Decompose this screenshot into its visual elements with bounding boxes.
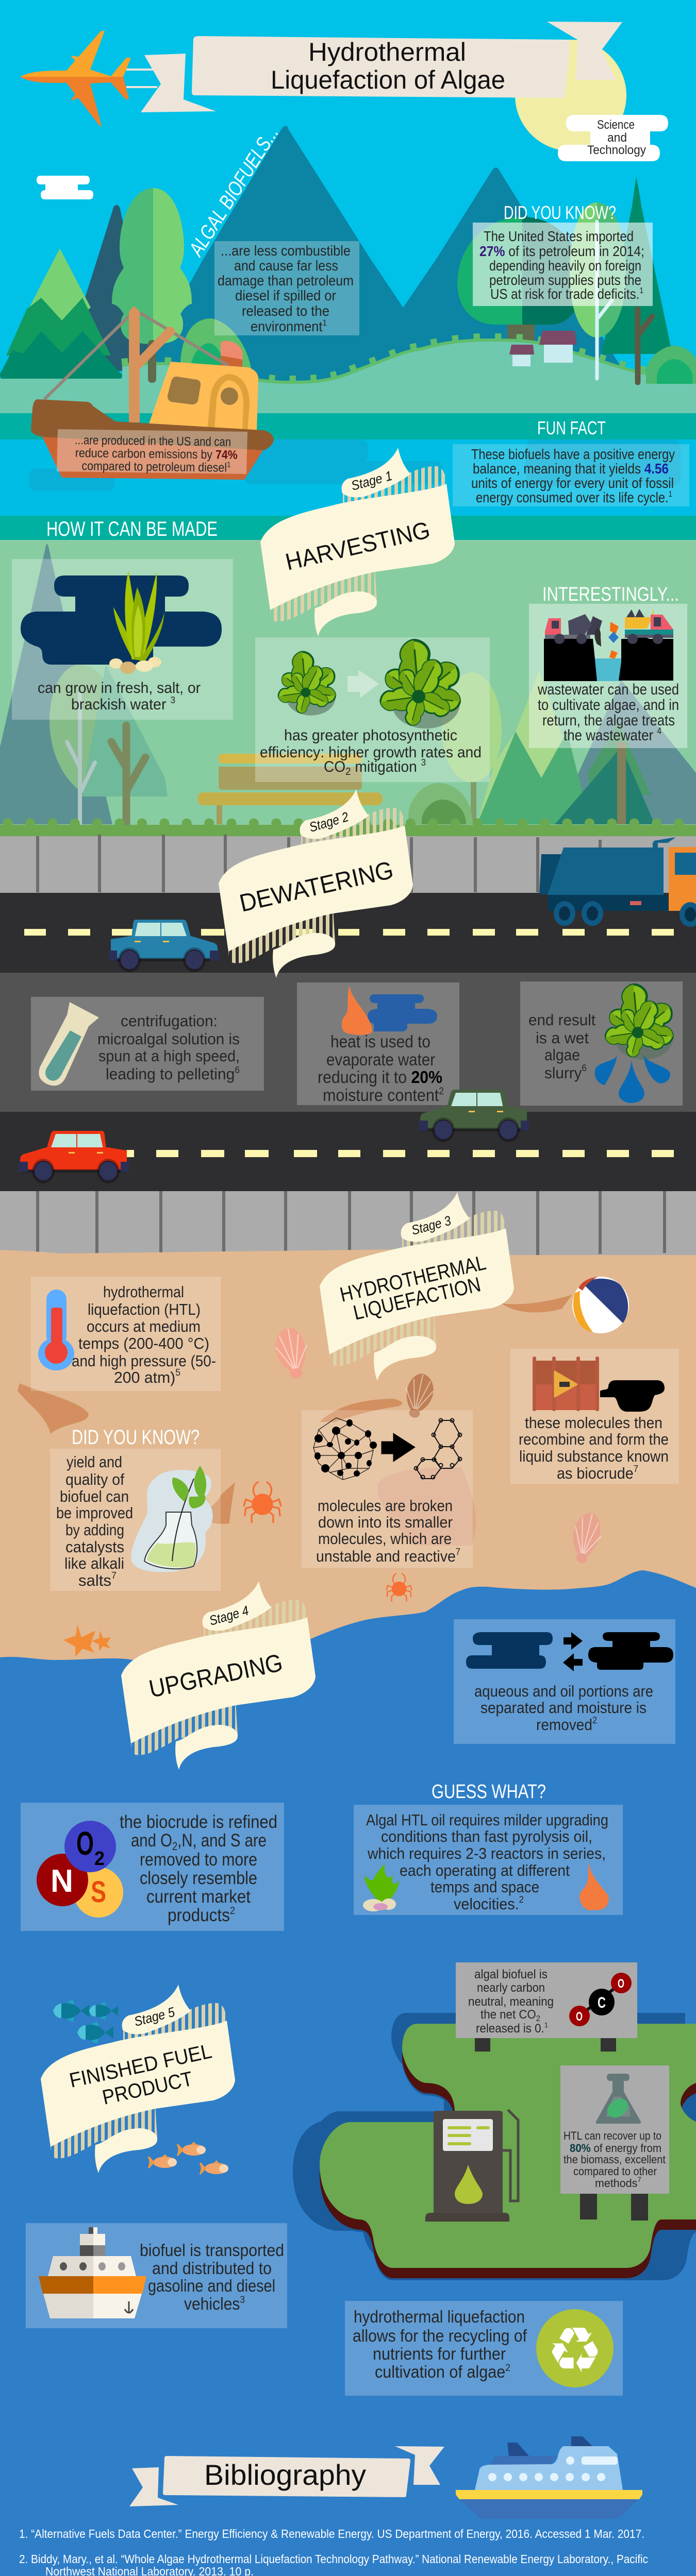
title banner [141, 22, 622, 112]
panel: biocrude refined: the biocrude is refined [120, 1812, 277, 1832]
callout: petroleum imports [473, 223, 653, 306]
panel: wet algae slurry: 6 [582, 1063, 587, 1073]
sign: energy recovery: 80% of energy from [570, 2142, 661, 2155]
icon: garbage truck [539, 837, 696, 927]
panel: milder upgrading conditions: conditions than fast pyrolysis oil, [381, 1827, 592, 1845]
icon: seaweed [109, 570, 164, 674]
callout: fun fact [453, 444, 689, 506]
icon: green car [419, 1090, 529, 1142]
banner: stage 3 hydrothermal liquefaction [320, 1192, 514, 1381]
panel: milder upgrading conditions: which requires 2-3 reactors in series, [367, 1844, 606, 1862]
panel: photosynthetic efficiency: mitigation [351, 758, 421, 775]
science and technology cloud label: Technology [587, 143, 646, 157]
title text line 1: Hydrothermal [308, 38, 466, 66]
banner: stage 5 finished fuel product: PRODUCT [101, 2067, 195, 2109]
heading: did you know (catalysts): DID YOU KNOW? [72, 1426, 200, 1449]
panel: recycling nutrients: cultivation of algae [375, 2362, 516, 2381]
panel: aqueous and oil separation: separated and moisture is [480, 1699, 647, 1717]
tree behind boat [112, 188, 192, 383]
background: sand [0, 1249, 696, 1700]
banner: stage 3 hydrothermal liquefaction: LIQUEFACTION [351, 1273, 483, 1325]
callout: produced in the US: reduce carbon emissions by 74% [75, 446, 238, 462]
panel: grows in any water: brackish water [71, 696, 171, 713]
callout: fun fact: balance, meaning that it yields 4.56 [473, 461, 669, 477]
panel: photosynthetic efficiency: has greater photosynthetic [284, 727, 457, 744]
panel: transported and distributed: gasoline and diesel [148, 2276, 275, 2295]
small white cloud [37, 176, 93, 199]
panel: aqueous and oil separation: removed [536, 1716, 599, 1734]
icon: white ship [39, 2227, 146, 2318]
callout: petroleum imports: depending heavily on foreign [489, 258, 641, 274]
panel: heat evaporates water: evaporate water [326, 1050, 435, 1069]
icon: CO2 molecule: C [598, 1994, 606, 2011]
sign: carbon neutral: 1 [544, 2021, 548, 2029]
panel: catalysts: like alkali [64, 1554, 124, 1572]
callout: produced in the US: compared to petroleum diesel [81, 459, 245, 475]
banner: stage 2 dewatering: DEWATERING [237, 856, 396, 918]
road 1 [0, 893, 696, 973]
icon: recycle [536, 2309, 614, 2387]
icon: O2 N S circles: O [76, 1825, 94, 1862]
houses [509, 331, 577, 366]
panel: transported and distributed: 3 [240, 2295, 245, 2306]
callout: produced in the US: ...are produced in the US and can [75, 433, 231, 449]
panel: biocrude refined: current market [146, 1887, 251, 1907]
sign: carbon neutral: the net CO [480, 2008, 540, 2022]
panel: molecules broken down: 7 [456, 1547, 460, 1557]
callout: petroleum imports: The United States imported [484, 228, 634, 244]
panel: centrifugation: microalgal solution is [97, 1030, 240, 1048]
banner: stage 1 harvesting [260, 448, 455, 636]
panel: heat evaporates water: 2 [439, 1086, 444, 1097]
panel: HTL conditions: 200 atm) [114, 1368, 177, 1386]
panel: photosynthetic efficiency: 2 [345, 766, 351, 777]
sign: carbon neutral: released is 0. [476, 2022, 550, 2036]
faded scenery behind harvesting [0, 544, 696, 824]
icon: water cloud [21, 575, 222, 665]
panel: heat evaporates water: reducing it to 20% [318, 1067, 442, 1087]
callout: petroleum imports: US at risk for trade deficits. [490, 286, 664, 302]
icon: flame [579, 1862, 609, 1910]
icon: falling waste [594, 622, 619, 659]
icon: blue cloud [368, 994, 437, 1031]
icon: CO2 molecule [569, 1973, 632, 2026]
icon: barrel and black cloud [533, 1357, 665, 1412]
evergreen base redraw [0, 331, 122, 379]
background: water [0, 439, 696, 516]
panel: recycling nutrients: allows for the recycling of [353, 2326, 527, 2345]
icon: right truck [625, 609, 673, 644]
boat hull [31, 399, 274, 480]
left tree trunk [148, 340, 156, 383]
bibliography banner [129, 2446, 444, 2506]
banner: stage 5 finished fuel product [41, 1985, 235, 2173]
icon: O2 N S circles: S [91, 1875, 106, 1909]
banner: stage 2 dewatering: Stage 2 [307, 809, 351, 835]
banner: stage 5 finished fuel product: Stage 5 [132, 2004, 176, 2029]
panel: HTL conditions: 5 [175, 1367, 180, 1378]
sign: energy recovery [560, 2065, 669, 2221]
panel: transported and distributed: biofuel is transported [140, 2241, 284, 2260]
callout: petroleum imports: 1 [639, 286, 643, 295]
panel: milder upgrading conditions: 2 [519, 1894, 524, 1905]
grass strip [0, 823, 696, 836]
panel: centrifugation: leading to pelleting [106, 1065, 239, 1083]
icon: flask with leaves [131, 1466, 213, 1572]
arrow: black [382, 1433, 415, 1462]
icon: cliffs and waste water [544, 616, 673, 681]
callout: less combustible: environment [251, 318, 330, 334]
panel: photosynthetic efficiency: 3 [421, 757, 426, 768]
lower fence [0, 1191, 696, 1258]
bibliography list [19, 2527, 671, 2576]
birch tree [597, 222, 612, 379]
callout: less combustible: diesel if spilled or [235, 287, 336, 303]
panel: centrifugation: 6 [235, 1065, 240, 1075]
panel: milder upgrading conditions: temps and space [430, 1878, 539, 1896]
panel: catalysts: quality of [65, 1470, 124, 1488]
panel: HTL conditions: liquefaction (HTL) [88, 1300, 201, 1318]
panel: centrifugation: spun at a high speed, [98, 1047, 240, 1065]
background: teal shoreline band [0, 413, 696, 439]
panel: catalysts [50, 1449, 221, 1591]
island with shadows [293, 2013, 696, 2280]
icon: red car [19, 1131, 129, 1183]
panel: catalysts: biofuel can [60, 1487, 129, 1505]
banner: stage 4 upgrading: Stage 4 [207, 1602, 251, 1629]
callout: less combustible [214, 241, 359, 335]
panel: recycling nutrients: nutrients for further [373, 2344, 506, 2363]
banner: stage 4 upgrading: UPGRADING [147, 1649, 285, 1703]
icon: CO2 molecule: O [618, 1977, 624, 1991]
icon: test tube [39, 1002, 99, 1086]
panel: molecules broken down [302, 1410, 476, 1568]
panel: photosynthetic efficiency: efficiency: higher growth rates and [260, 744, 482, 761]
panel: HTL conditions [31, 1277, 221, 1391]
icon: O2 N S circles: N [51, 1863, 73, 1899]
callout: produced in the US [57, 429, 247, 475]
callout: produced in the US: 1 [227, 461, 231, 469]
evergreen tree left [0, 248, 122, 379]
arrow: right [564, 1632, 583, 1650]
panel: molecules broken down: molecules, which are [318, 1530, 452, 1548]
icon: beach ball [572, 1277, 629, 1333]
panel: catalysts: yield and [67, 1453, 122, 1471]
background: green meadow [0, 540, 696, 828]
sign: carbon neutral: nearly carbon [477, 1981, 545, 1995]
sign: energy recovery: HTL can recover up to [564, 2129, 661, 2142]
light green tree right [570, 202, 626, 337]
icon: large plant [379, 639, 465, 728]
heading: guess what: GUESS WHAT? [432, 1781, 546, 1803]
panel: wet algae slurry: is a wet [536, 1029, 589, 1047]
panel: catalysts: salts [78, 1571, 111, 1589]
panel: biocrude molecules: 7 [634, 1464, 638, 1474]
callout: less combustible: and cause far less [234, 258, 338, 274]
callout: less combustible: released to the [242, 303, 329, 319]
panel: biocrude molecules [510, 1349, 679, 1484]
sign: carbon neutral: algal biofuel is [474, 1968, 548, 1981]
callout: petroleum imports: 27% of its petroleum in 2014; [479, 243, 644, 259]
panel: biocrude refined: products [168, 1905, 237, 1925]
panel: catalysts: 7 [111, 1570, 117, 1581]
icon: starfish [63, 1624, 111, 1657]
heading: did you know (top): DID YOU KNOW? [504, 202, 616, 223]
background: grey dewatering area [0, 973, 696, 1112]
panel: recycling nutrients [345, 2301, 623, 2396]
chimney [221, 341, 243, 368]
panel: biocrude refined: 2 [172, 1840, 177, 1853]
panel: heat evaporates water [297, 982, 459, 1105]
icon: teal fish group [53, 1999, 118, 2044]
banner: stage 3 hydrothermal liquefaction: HYDROTHERMAL [338, 1251, 488, 1307]
icon: CO2 molecule: O [576, 2010, 583, 2024]
sign: carbon neutral: neutral, meaning [468, 1995, 554, 2009]
panel: aqueous and oil separation [454, 1619, 675, 1744]
banner: stage 3 hydrothermal liquefaction: Stage 3 [410, 1213, 453, 1238]
panel: biocrude molecules: as biocrude [557, 1464, 639, 1482]
panel: transported and distributed: vehicles [184, 2294, 245, 2313]
icon: orange plane [20, 31, 157, 126]
arrow: left [563, 1653, 583, 1671]
panel: biocrude refined: closely resemble [140, 1868, 257, 1888]
heading: how it can be made: HOW IT CAN BE MADE [46, 518, 218, 540]
science and technology cloud label: Science [597, 118, 635, 132]
sand patches [18, 1295, 572, 1524]
bush behind boat [180, 318, 253, 392]
panel: grows in any water: can grow in fresh, salt, or [38, 680, 201, 697]
icon: thermometer [38, 1290, 74, 1370]
icon: black cloud [588, 1632, 673, 1670]
boat cabin [148, 362, 258, 432]
road 2 [0, 1112, 696, 1191]
panel: wet algae slurry: slurry [544, 1064, 584, 1082]
icon: blue car [109, 920, 219, 972]
title text line 2: Liquefaction of Algae [271, 65, 505, 94]
panel: biocrude molecules: these molecules then [525, 1414, 662, 1432]
panel: wet algae slurry [520, 981, 683, 1106]
panel: molecules broken down: molecules are broken [318, 1497, 453, 1515]
icon: plant [604, 984, 677, 1060]
icon: growth arrow [347, 670, 379, 698]
bare brown tree [638, 309, 652, 382]
panel: heat evaporates water: moisture content [323, 1086, 449, 1105]
icon: O2 N S circles [37, 1821, 123, 1918]
icon: crab small [386, 1573, 412, 1602]
text: algal biofuels heading: ALGAL BIOFUELS... [185, 123, 283, 261]
icon: O2 N S circles: 2 [94, 1848, 105, 1870]
callout: less combustible: ...are less combustible [221, 243, 351, 259]
panel: catalysts: by adding [65, 1521, 124, 1539]
water shadows [29, 439, 681, 491]
panel: recycling nutrients: 2 [505, 2363, 510, 2374]
panel: wastewater: return, the algae treats [542, 712, 675, 729]
icon: droplets [595, 1055, 670, 1103]
panel: wet algae slurry: end result [528, 1011, 595, 1029]
icon: recycle: ♻ [546, 2314, 603, 2387]
background: ocean [0, 1570, 696, 2576]
bibliography list: 1. “Alternative Fuels Data Center.” Energy Efficiency & Renewable Energy. US Department of Energy, 2016. Accessed 1 Mar. 2017. [19, 2527, 644, 2540]
icon: molecular network [313, 1418, 377, 1480]
panel: wet algae slurry: algae [544, 1046, 580, 1064]
panel: biocrude refined: removed to more [140, 1850, 257, 1870]
panel: HTL conditions: hydrothermal [103, 1283, 184, 1301]
sign: energy recovery: compared to other [573, 2165, 657, 2178]
panel: transported and distributed [26, 2223, 287, 2328]
upper fence [0, 835, 696, 893]
banner: stage 5 finished fuel product: FINISHED FUEL [68, 2040, 214, 2092]
icon: left truck [545, 614, 592, 644]
callout: fun fact: 1 [668, 490, 672, 499]
sign: energy recovery: methods [595, 2177, 638, 2190]
sign: energy recovery: the biomass, excellent [564, 2153, 666, 2166]
panel: HTL conditions: temps (200-400 °C) [78, 1334, 209, 1352]
panel: milder upgrading conditions: each operating at different [400, 1861, 570, 1879]
boat mast and ropes [44, 307, 228, 422]
banner: stage 1 harvesting: Stage 1 [350, 468, 394, 494]
icon: fuel pump [425, 2110, 518, 2222]
bibliography banner: Bibliography [204, 2459, 366, 2491]
panel: catalysts: catalysts [65, 1538, 124, 1556]
bush right [646, 346, 696, 384]
panel: milder upgrading conditions [354, 1805, 623, 1915]
icon: navy cloud [466, 1632, 553, 1669]
panel: centrifugation: centrifugation: [121, 1012, 218, 1030]
banner: stage 4 upgrading [121, 1581, 316, 1770]
panel: heat evaporates water: heat is used to [330, 1032, 430, 1051]
callout: petroleum imports: petroleum supplies puts the [489, 272, 641, 288]
panel: aqueous and oil separation: aqueous and oil portions are [474, 1682, 653, 1700]
background: sky [0, 0, 696, 516]
panel: wastewater: the wastewater [564, 727, 668, 744]
callout: less combustible: damage than petroleum [218, 273, 354, 289]
icon: flask with leaf [596, 2074, 641, 2124]
panel: transported and distributed: and distributed to [152, 2259, 272, 2278]
icon: flame [342, 986, 372, 1036]
panel: milder upgrading conditions: Algal HTL oil requires milder upgrading [366, 1811, 608, 1829]
panel: molecules broken down: down into its smaller [318, 1513, 453, 1531]
panel: biocrude refined: 2 [230, 1905, 235, 1917]
panel: grows in any water [12, 559, 233, 720]
panel: biocrude refined: ,N, and S are [177, 1831, 267, 1851]
panel: catalysts: be improved [56, 1504, 133, 1522]
icon: hexagon molecule [415, 1419, 462, 1479]
science and technology cloud label [558, 115, 668, 161]
panel: wastewater: 4 [657, 726, 661, 736]
panel: photosynthetic efficiency [255, 637, 490, 782]
icon: brown shell [400, 1370, 437, 1421]
icon: gold fish group [148, 2142, 228, 2174]
panel: biocrude refined [21, 1803, 284, 1931]
sign: carbon neutral: 2 [536, 2014, 540, 2023]
panel: centrifugation [31, 997, 264, 1091]
panel: biocrude molecules: recombine and form the [519, 1430, 669, 1448]
panel: biocrude molecules: liquid substance known [519, 1447, 669, 1465]
icon: sun [515, 40, 626, 151]
icon: algae [363, 1863, 400, 1911]
panel: wastewater [529, 604, 687, 748]
panel: aqueous and oil separation: 2 [592, 1715, 597, 1725]
panel: recycling nutrients: hydrothermal liquefaction [354, 2307, 525, 2326]
icon: crab large [244, 1482, 281, 1523]
panel: HTL conditions: occurs at medium [87, 1317, 201, 1335]
hill with grass rim [0, 342, 696, 413]
icon: faint pink shell [568, 1510, 605, 1566]
panel: grows in any water: 3 [170, 695, 175, 705]
icon: pink shell [272, 1325, 313, 1381]
bench [197, 754, 383, 824]
mountains [62, 126, 672, 392]
banner: stage 1 harvesting: HARVESTING [283, 516, 433, 575]
panel: milder upgrading conditions: velocities. [454, 1895, 524, 1913]
banner: stage 2 dewatering [219, 789, 413, 978]
callout: less combustible: 1 [322, 318, 327, 328]
icon: cruise ship [456, 2436, 642, 2519]
panel: molecules broken down: unstable and reactive [316, 1547, 468, 1565]
panel: photosynthetic efficiency: CO [324, 758, 347, 775]
bibliography list: 2. Biddy, Mary., et al. “Whole Algae Hydrothermal Liquefaction Technology Pathway.” National Renewable Energy Laboratory., Pacific [19, 2552, 648, 2566]
panel: HTL conditions: and high pressure (50- [72, 1352, 216, 1370]
background: teal band behind how it can be made [0, 516, 696, 540]
science and technology cloud label: and [607, 131, 627, 145]
icon: small plant [277, 651, 339, 716]
big tree right [457, 217, 582, 345]
panel: biocrude refined: and O [131, 1831, 180, 1851]
sign: energy recovery: 7 [637, 2175, 641, 2183]
sign: carbon neutral [456, 1962, 637, 2052]
heading: fun fact: FUN FACT [537, 417, 606, 438]
